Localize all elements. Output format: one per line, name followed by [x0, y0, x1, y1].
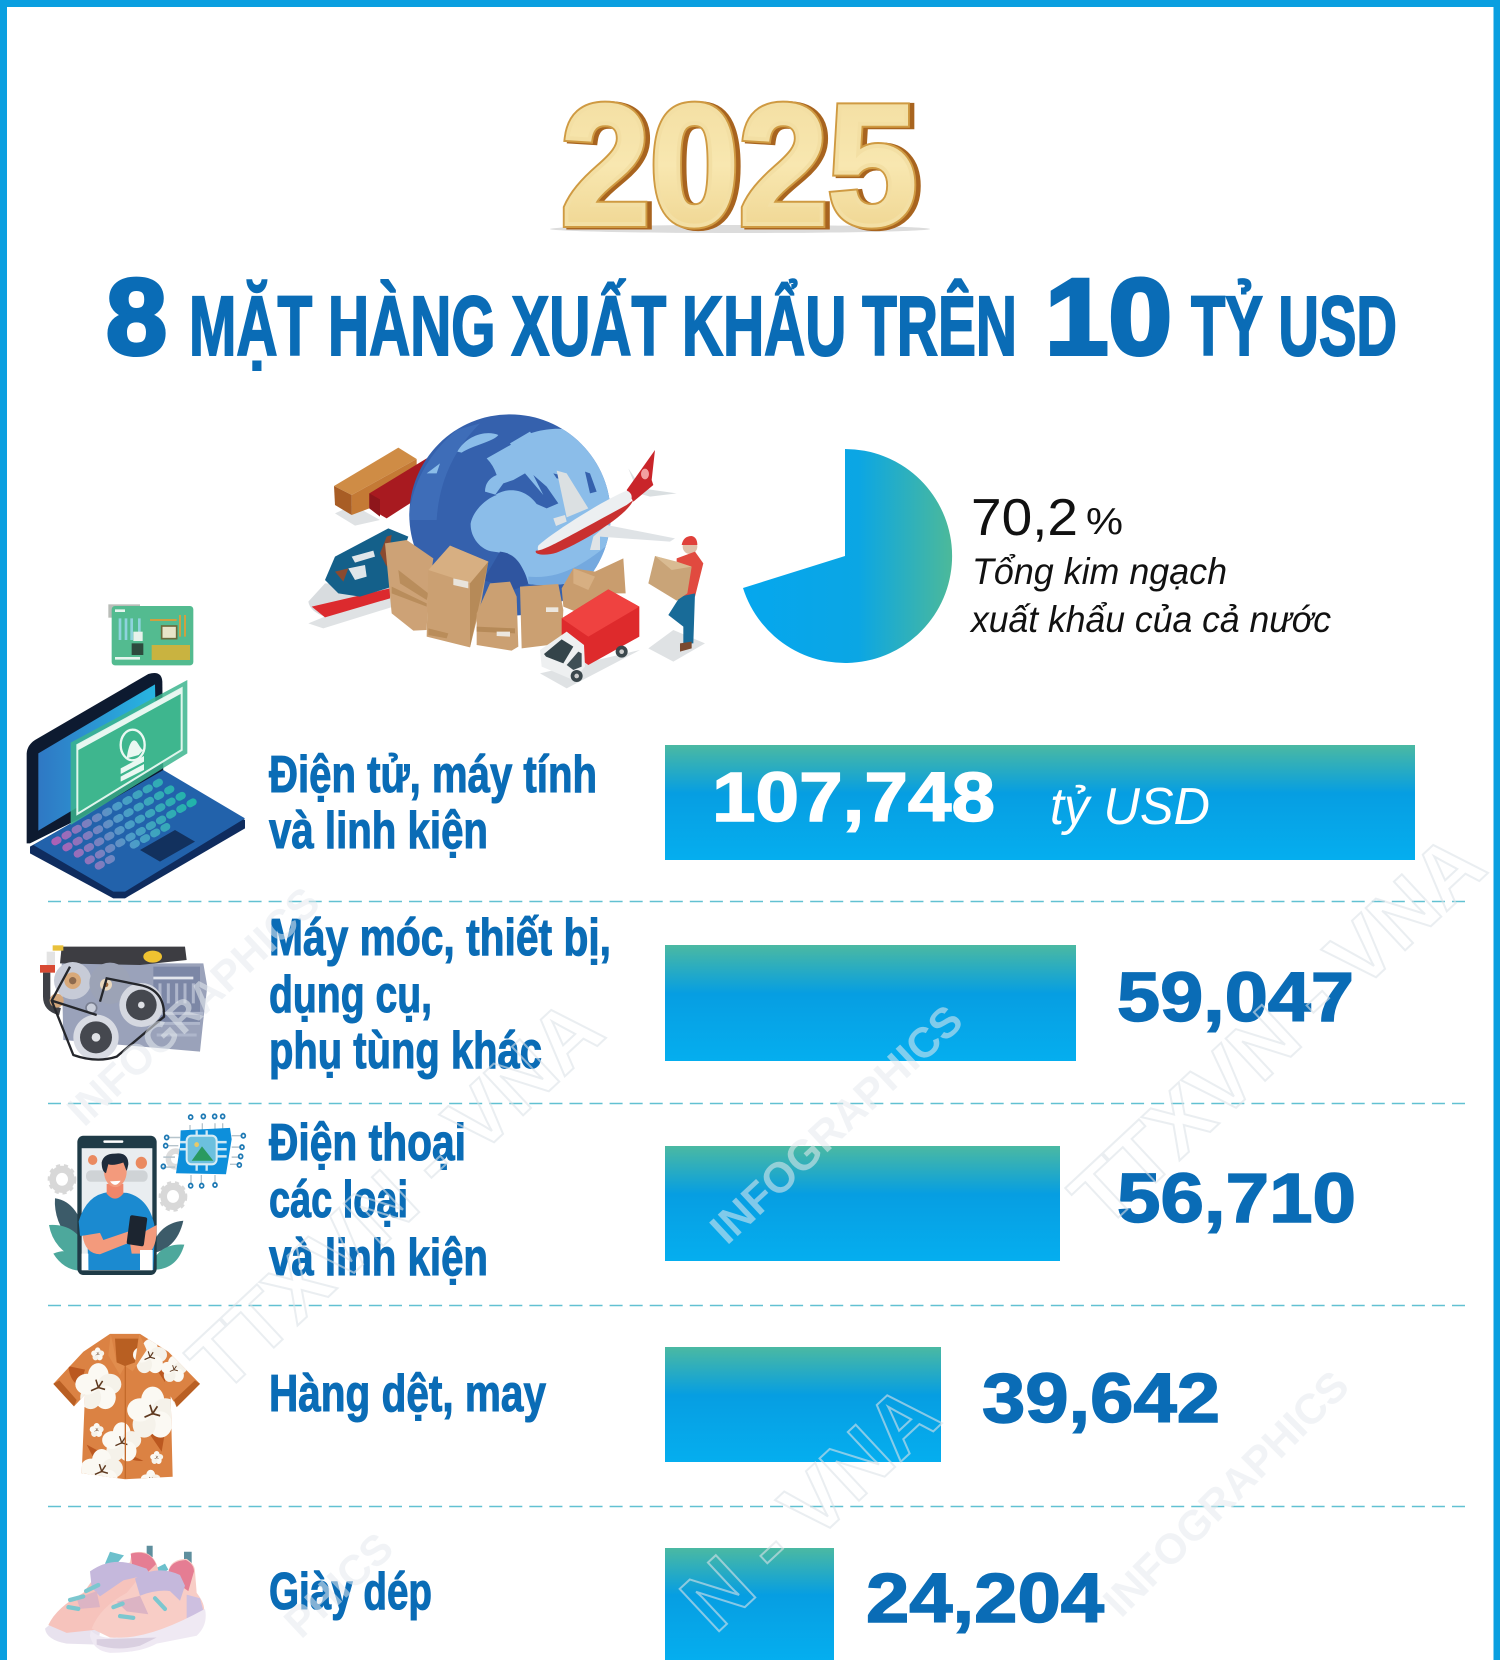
value 4: 39,642 — [982, 1359, 1220, 1437]
airplane — [628, 468, 677, 497]
label 1 — [269, 746, 597, 860]
bar 2 — [665, 945, 1076, 1061]
pie caption: xuất khẩu của cả nước — [969, 599, 1331, 640]
title: TỶ USD — [1191, 279, 1397, 373]
value 5: 24,204 — [866, 1559, 1104, 1637]
title: 10 — [1045, 256, 1172, 377]
label 2 — [269, 909, 611, 1080]
bar 1 — [665, 745, 1415, 860]
label 1: Điện tử, máy tính — [269, 746, 597, 804]
year 2025 in gold: 2025 — [561, 70, 917, 261]
icon: floral shirt — [53, 1334, 200, 1491]
label 4: Hàng dệt, may — [269, 1365, 546, 1423]
icon: engine — [40, 945, 207, 1060]
containers — [334, 448, 417, 495]
shadows — [308, 505, 705, 688]
worker — [683, 539, 697, 554]
pie chart — [743, 449, 952, 663]
year 2025 in gold: 2025 — [565, 71, 921, 262]
watermarks: INFOGRAPHICS — [59, 879, 329, 1135]
icon: laptop — [27, 673, 245, 898]
front-right shoe — [92, 1559, 204, 1641]
unit: tỷ USD — [1050, 778, 1210, 836]
bar 5 — [665, 1548, 834, 1660]
watermarks: N - VNA — [663, 1366, 956, 1648]
label 2: dụng cụ, — [269, 966, 432, 1024]
row 2: machinery — [269, 909, 1354, 1080]
year 2025 in gold: 2025 — [561, 70, 917, 261]
icon: motherboard — [108, 604, 193, 665]
globe — [409, 414, 611, 616]
ship — [308, 583, 392, 617]
row 4: textiles — [269, 1347, 1220, 1462]
straps and laces — [90, 1562, 150, 1596]
label 2: phụ tùng khác — [269, 1022, 542, 1080]
watermarks: TTXVN - VNA — [170, 981, 620, 1409]
bar 3 — [665, 1146, 1060, 1261]
label 3 — [269, 1114, 488, 1287]
label 3: và linh kiện — [269, 1229, 488, 1287]
watermarks: INFOGRAPHICS — [702, 997, 972, 1253]
icon: man with smartphone and chip — [49, 1114, 245, 1275]
label 3: Điện thoại — [269, 1114, 466, 1172]
value 1: 107,748 — [712, 758, 995, 836]
pie caption — [969, 551, 1331, 640]
boxes — [385, 540, 433, 631]
pie percentage: 70,2 — [971, 489, 1078, 547]
watermarks: PHICS — [276, 1524, 403, 1647]
dividers — [48, 902, 1465, 1506]
watermarks: TTXVN - VNA — [1052, 816, 1500, 1244]
row 3: phones — [269, 1114, 1356, 1287]
pie percentage: % — [1086, 501, 1123, 543]
row 1: electronics — [269, 745, 1415, 860]
watermarks: INFOGRAPHICS — [1095, 1362, 1358, 1626]
illustration: global trade scene — [308, 414, 705, 688]
icon: sneakers — [45, 1546, 206, 1653]
label 5: Giày dép — [269, 1563, 432, 1621]
value 3: 56,710 — [1117, 1159, 1356, 1237]
title: MẶT HÀNG XUẤT KHẨU TRÊN — [189, 279, 1017, 373]
pie percentage — [971, 489, 1123, 547]
row 5: footwear — [269, 1548, 1104, 1660]
value 2: 59,047 — [1117, 958, 1354, 1036]
back-left shoe — [45, 1616, 102, 1645]
label 2: Máy móc, thiết bị, — [269, 909, 611, 967]
watermarks — [59, 816, 1500, 1648]
title: 8 — [106, 256, 167, 377]
label 3: các loại — [269, 1171, 408, 1229]
pie caption: Tổng kim ngạch — [972, 551, 1227, 592]
truck — [562, 589, 639, 665]
label 1: và linh kiện — [269, 802, 488, 860]
bar 4 — [665, 1347, 941, 1462]
